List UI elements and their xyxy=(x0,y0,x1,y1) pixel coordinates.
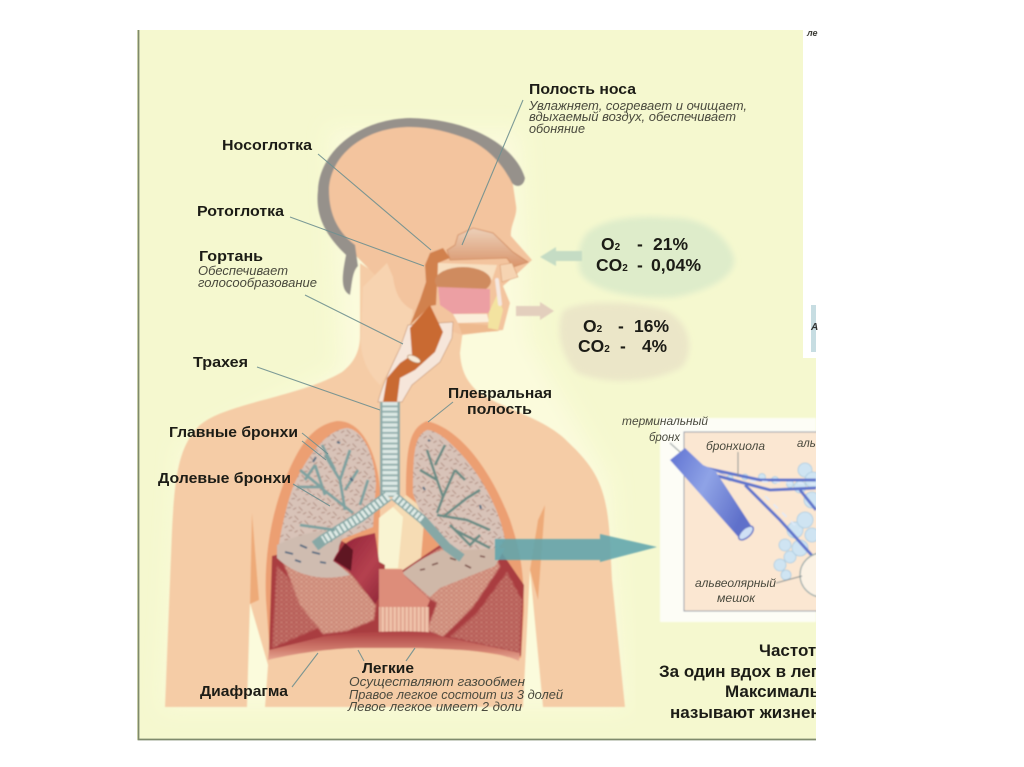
label: inhaled air composition: - xyxy=(637,234,643,254)
text block: breathing facts: называют жизненной емкостью xyxy=(670,703,940,722)
label: larynx: голосообразование xyxy=(198,276,317,290)
label: exhaled air composition: CO2 xyxy=(578,336,610,356)
label: inset captions: терминальный xyxy=(622,416,709,428)
label: inhaled air composition: CO2 xyxy=(596,255,628,275)
label: inset captions: бронхиола xyxy=(706,441,765,453)
armpit creases xyxy=(250,505,545,604)
label: nasal cavity: обоняние xyxy=(529,122,585,136)
left lung dense band xyxy=(277,531,350,578)
inset leader lines xyxy=(670,443,802,583)
connector lines xyxy=(257,100,523,687)
teeth xyxy=(497,280,500,304)
left outer lobe xyxy=(272,565,318,648)
label: larynx: Обеспечивает xyxy=(198,264,288,278)
label: trachea: Трахея xyxy=(193,354,248,371)
pharynx xyxy=(410,248,450,325)
trachea xyxy=(315,402,462,558)
label: inhaled air composition: - xyxy=(637,255,643,275)
tongue xyxy=(438,287,490,314)
right middle lobe xyxy=(403,548,500,637)
lower jaw xyxy=(453,314,489,323)
label: inhaled air composition: 0,04% xyxy=(651,255,701,275)
label: diaphragm: Диафрагма xyxy=(200,683,289,700)
lower lung shadow xyxy=(269,540,524,656)
label: pleural cavity: полость xyxy=(467,401,532,418)
bronchioles xyxy=(705,468,816,560)
neck back light area xyxy=(361,263,413,385)
arrow: inhaled air xyxy=(540,247,582,266)
hair xyxy=(317,118,525,295)
pulmonary specks xyxy=(313,440,481,509)
larynx cartilage xyxy=(406,353,422,365)
label: lungs: Осуществляют газообмен xyxy=(349,675,525,689)
right outer lower lobe xyxy=(450,572,522,653)
label: oropharynx: Ротоглотка xyxy=(197,203,285,220)
alveolar sac circle xyxy=(800,553,844,597)
palate xyxy=(438,263,497,290)
text block: breathing facts xyxy=(659,641,940,722)
soft halo xyxy=(165,130,625,707)
mediastinum gap xyxy=(378,495,425,570)
label: nasopharynx: Носоглотка xyxy=(222,137,313,154)
terminal bronchus xyxy=(670,448,752,539)
label: exhaled air composition: - xyxy=(618,316,624,336)
upper lip block xyxy=(500,263,518,282)
label: main bronchi: Главные бронхи xyxy=(169,424,298,441)
diaphragm striped centre xyxy=(379,607,429,637)
label: inhaled air composition: 21% xyxy=(653,234,688,254)
label: nasal cavity: Полость носа xyxy=(529,81,637,98)
top fragment of cropped text: ле xyxy=(806,28,818,38)
label: inset captions xyxy=(622,416,850,605)
label: lungs: Легкие xyxy=(362,660,414,677)
label: inhaled air composition xyxy=(596,234,701,275)
text block: breathing facts: За один вдох в легкие поступает xyxy=(659,662,936,681)
mouth roof xyxy=(435,267,491,295)
panel: yellow background xyxy=(137,30,816,740)
torso and arms xyxy=(165,263,625,707)
label: inset captions: альвеолярный xyxy=(695,578,777,590)
label: inhaled air composition: O2 xyxy=(601,234,621,254)
text block: breathing facts: Максимальный объем xyxy=(725,682,915,701)
figure: human body with respiratory organs xyxy=(165,118,625,707)
inset: alveoli enlarged view xyxy=(660,418,844,622)
label: exhaled air composition: 16% xyxy=(634,316,669,336)
alveoli clusters xyxy=(727,463,821,580)
arrow: from lung to inset xyxy=(495,534,657,562)
airway: white tissue around larynx xyxy=(378,322,453,402)
larynx xyxy=(383,305,443,402)
left middle lobe xyxy=(283,556,376,634)
chin bone xyxy=(488,295,503,330)
label: exhaled air composition: 4% xyxy=(642,336,667,356)
label: nasal cavity: вдыхаемый воздух, обеспечивает xyxy=(529,110,736,124)
label: lungs: Левое легкое имеет 2 доли xyxy=(347,700,522,714)
label: lobar bronchi: Долевые бронхи xyxy=(158,470,291,487)
right lung dense band xyxy=(402,548,505,597)
label: larynx: Гортань xyxy=(199,248,263,265)
label: inset captions: бронх xyxy=(649,432,681,444)
head xyxy=(328,125,532,335)
cropped side panel fragment xyxy=(810,305,818,352)
inset frame xyxy=(684,432,824,611)
panel frame xyxy=(138,30,816,740)
left bronchial tree xyxy=(297,445,368,530)
diaphragm xyxy=(268,569,520,661)
label: nasal cavity xyxy=(528,81,747,136)
label: exhaled air composition xyxy=(578,316,669,356)
left lung upper xyxy=(277,428,376,568)
label: lungs: Правое легкое состоит из 3 долей xyxy=(349,688,563,702)
right bronchial tree xyxy=(420,445,490,548)
label: nasal cavity: Увлажняет, согревает и очищает, xyxy=(528,99,747,113)
label: lungs xyxy=(347,660,563,714)
right main bronchus xyxy=(394,496,462,558)
callout: exhaled air cloud xyxy=(560,303,689,381)
nasal cavity xyxy=(447,228,528,267)
white crop on right side xyxy=(816,0,1024,767)
heart xyxy=(333,533,384,604)
text block: breathing facts: Частота дыхания xyxy=(759,641,905,660)
label: exhaled air composition: - xyxy=(620,336,626,356)
callout: inhaled air cloud xyxy=(578,217,734,298)
arrow: exhaled air xyxy=(516,302,554,320)
label: inset captions: альвеолы xyxy=(797,438,850,450)
label: inset captions: мешок xyxy=(717,593,756,605)
pleural cavity outline xyxy=(266,421,380,655)
cropped side panel fragment: А xyxy=(810,322,818,333)
right lung upper xyxy=(413,430,505,555)
labels xyxy=(158,81,940,722)
label: pleural cavity xyxy=(448,385,552,418)
label: larynx xyxy=(198,248,317,290)
label: exhaled air composition: O2 xyxy=(583,316,603,336)
label: pleural cavity: Плевральная xyxy=(448,385,552,402)
left main bronchus xyxy=(315,496,388,546)
